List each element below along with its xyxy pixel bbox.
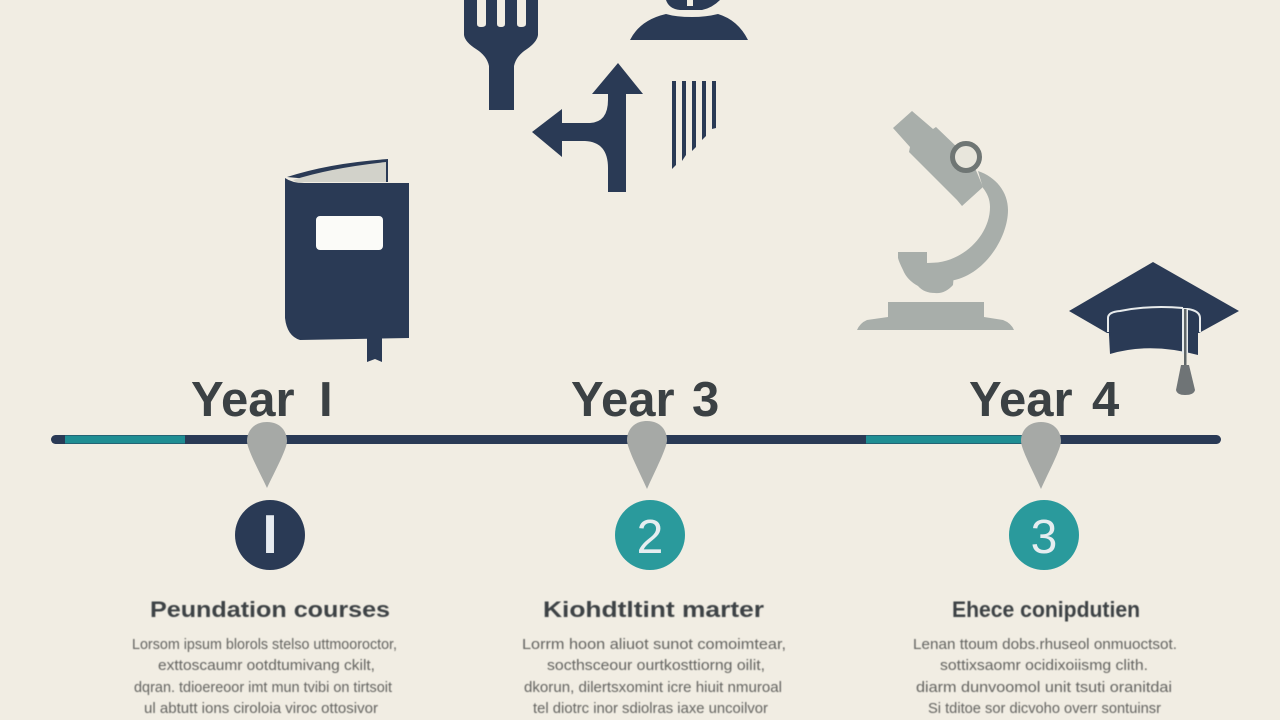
body text: foundation courses: ul abtutt ions ciroloia viroc ottosivor xyxy=(144,701,378,717)
heading: middle year: Kiohdtltint marter xyxy=(543,597,764,622)
body text: middle year: tel diotrc inor sdiolras iaxe uncoilvor xyxy=(533,701,768,717)
heading: thesis completion: Ehece conipdutien xyxy=(952,597,1140,622)
year label 2: 3 xyxy=(692,373,719,427)
icon: microscope xyxy=(857,111,1014,330)
step badge 1 xyxy=(235,500,305,570)
body text: foundation courses: dqran. tdioereoor imt mun tvibi on tirtsoit xyxy=(134,680,392,696)
body text: foundation courses: exttoscaumr ootdtumivang ckilt, xyxy=(158,658,375,674)
icon: descending bars xyxy=(672,81,716,169)
body text: thesis completion: diarm dunvoomol unit tsuti oranitdai xyxy=(916,680,1172,696)
body text: thesis completion: Si tditoe sor dicvoho overr sontuinsr xyxy=(928,701,1161,717)
body text: thesis completion: sottixsaomr ocidixoiismg clith. xyxy=(940,658,1148,674)
icon: person bust xyxy=(630,0,748,40)
body text: middle year: socthsceour ourtkosttiorng oilit, xyxy=(547,658,765,674)
step badge 3: 3 xyxy=(1031,511,1057,564)
body text: middle year: Lorrm hoon aliuot sunot comoimtear, xyxy=(522,637,786,653)
timeline marker 1 xyxy=(247,422,287,488)
body text: foundation courses xyxy=(132,637,397,717)
panel: thesis completion xyxy=(913,597,1177,717)
year label 3: Year xyxy=(969,373,1073,427)
step badge 2 xyxy=(615,500,685,570)
step badge 3 xyxy=(1009,500,1079,570)
body text: thesis completion: Lenan ttoum dobs.rhuseol onmuoctsot. xyxy=(913,637,1177,653)
year label 3: 4 xyxy=(1092,373,1119,427)
timeline bar xyxy=(51,435,1221,444)
timeline marker 2 xyxy=(627,421,667,489)
step badge 1: I xyxy=(262,503,278,565)
body text: middle year: dkorun, dilertsxomint icre hiuit nmuroal xyxy=(524,680,782,696)
heading: foundation courses: Peundation courses xyxy=(150,597,390,622)
icon: fork xyxy=(464,0,538,110)
year label 2: Year xyxy=(571,373,675,427)
panel: middle year xyxy=(522,597,786,717)
panel: foundation courses xyxy=(132,597,397,717)
body text: thesis completion xyxy=(913,637,1177,717)
icon: book xyxy=(285,159,409,362)
body text: middle year xyxy=(522,637,786,717)
body text: foundation courses: Lorsom ipsum blorols stelso uttmooroctor, xyxy=(132,637,397,653)
year label 1: I xyxy=(319,373,333,427)
year label 1: Year xyxy=(191,373,295,427)
icon: forking arrow xyxy=(532,63,643,192)
step badge 2: 2 xyxy=(637,511,663,564)
timeline marker 3 xyxy=(1021,422,1061,489)
icon: graduation cap xyxy=(1069,262,1239,395)
